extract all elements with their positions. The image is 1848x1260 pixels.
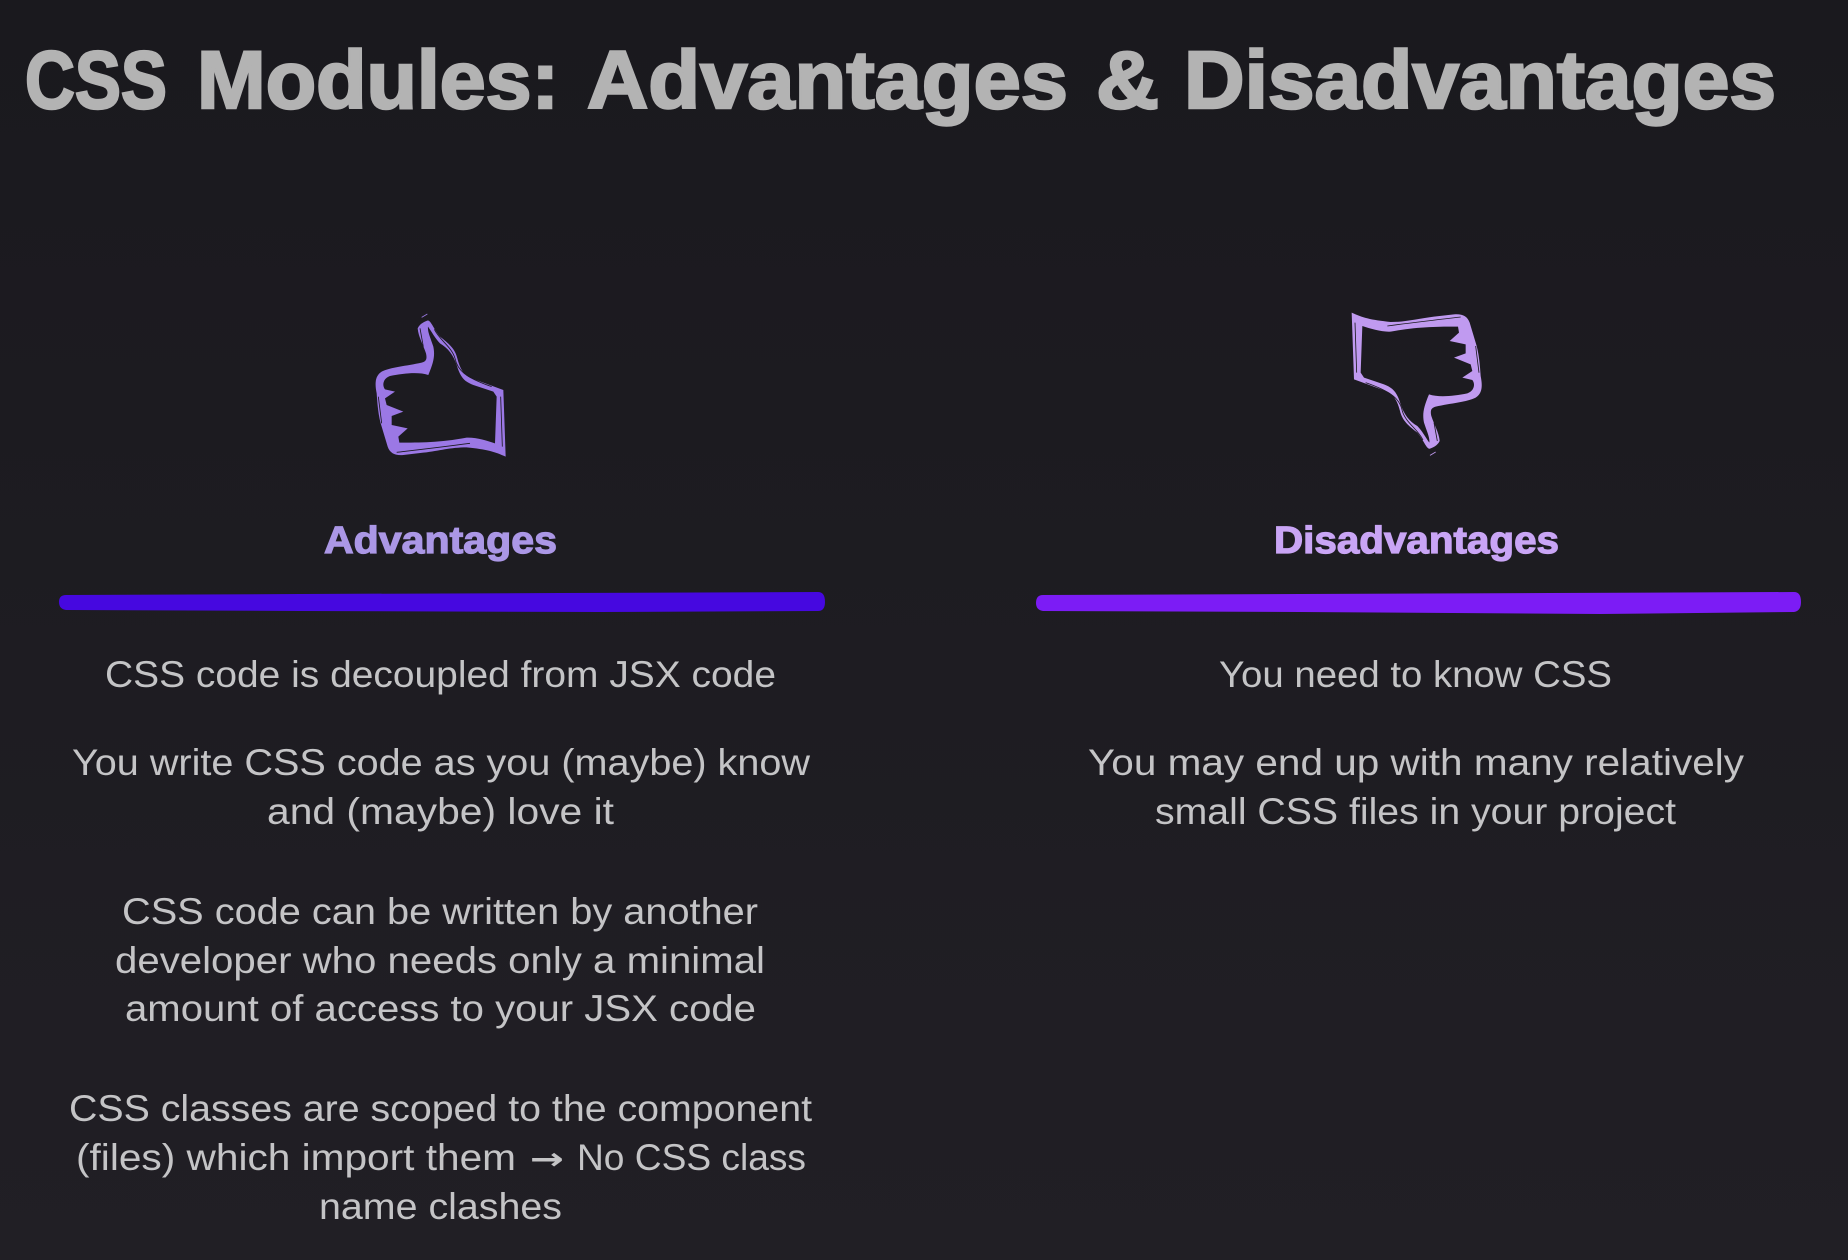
text block: disadvantage 2 — [1088, 742, 1745, 832]
text block: advantage 3: CSS code can be written by another — [122, 891, 758, 932]
text block: advantage 4: name clashes — [319, 1186, 562, 1227]
panel: disadvantages — [1036, 313, 1801, 832]
title: CSS — [25, 35, 167, 126]
text block: advantage 4: (files) which import them — [76, 1137, 516, 1178]
text block: advantage 3: amount of access to your JSX code — [125, 988, 756, 1029]
title — [25, 35, 1776, 126]
text block: advantage 2 — [72, 742, 810, 832]
text block: advantage 3 — [115, 891, 765, 1029]
panel: advantages — [59, 314, 825, 1227]
text block: disadvantage 2: small CSS files in your project — [1155, 791, 1677, 832]
heading: Disadvantages: Disadvantages — [1274, 520, 1559, 562]
divider bar: advantages — [59, 592, 825, 612]
text block: disadvantage 2: You may end up with many relatively — [1088, 742, 1745, 783]
text block: advantage 2: You write CSS code as you (maybe) know — [72, 742, 810, 783]
title: Advantages — [587, 35, 1068, 126]
icon: thumbs down — [1352, 313, 1482, 455]
text block: advantage 4: CSS classes are scoped to the component — [69, 1088, 813, 1129]
text block: advantage 2: and (maybe) love it — [267, 791, 615, 832]
icon: thumbs up — [376, 314, 506, 457]
text block: advantage 4 — [69, 1088, 813, 1227]
divider bar: disadvantages — [1036, 592, 1801, 614]
title: Modules: — [197, 35, 559, 126]
title: Disadvantages — [1184, 35, 1776, 126]
text block: advantage 3: developer who needs only a minimal — [115, 940, 765, 981]
text block: disadvantage 1: You need to know CSS — [1219, 654, 1612, 695]
text block: advantage 4: → — [530, 1142, 564, 1177]
heading: Advantages: Advantages — [324, 520, 557, 562]
title: & — [1096, 35, 1159, 126]
text block: advantage 4: No CSS class — [577, 1137, 806, 1178]
text block: advantage 1: CSS code is decoupled from JSX code — [105, 654, 776, 695]
